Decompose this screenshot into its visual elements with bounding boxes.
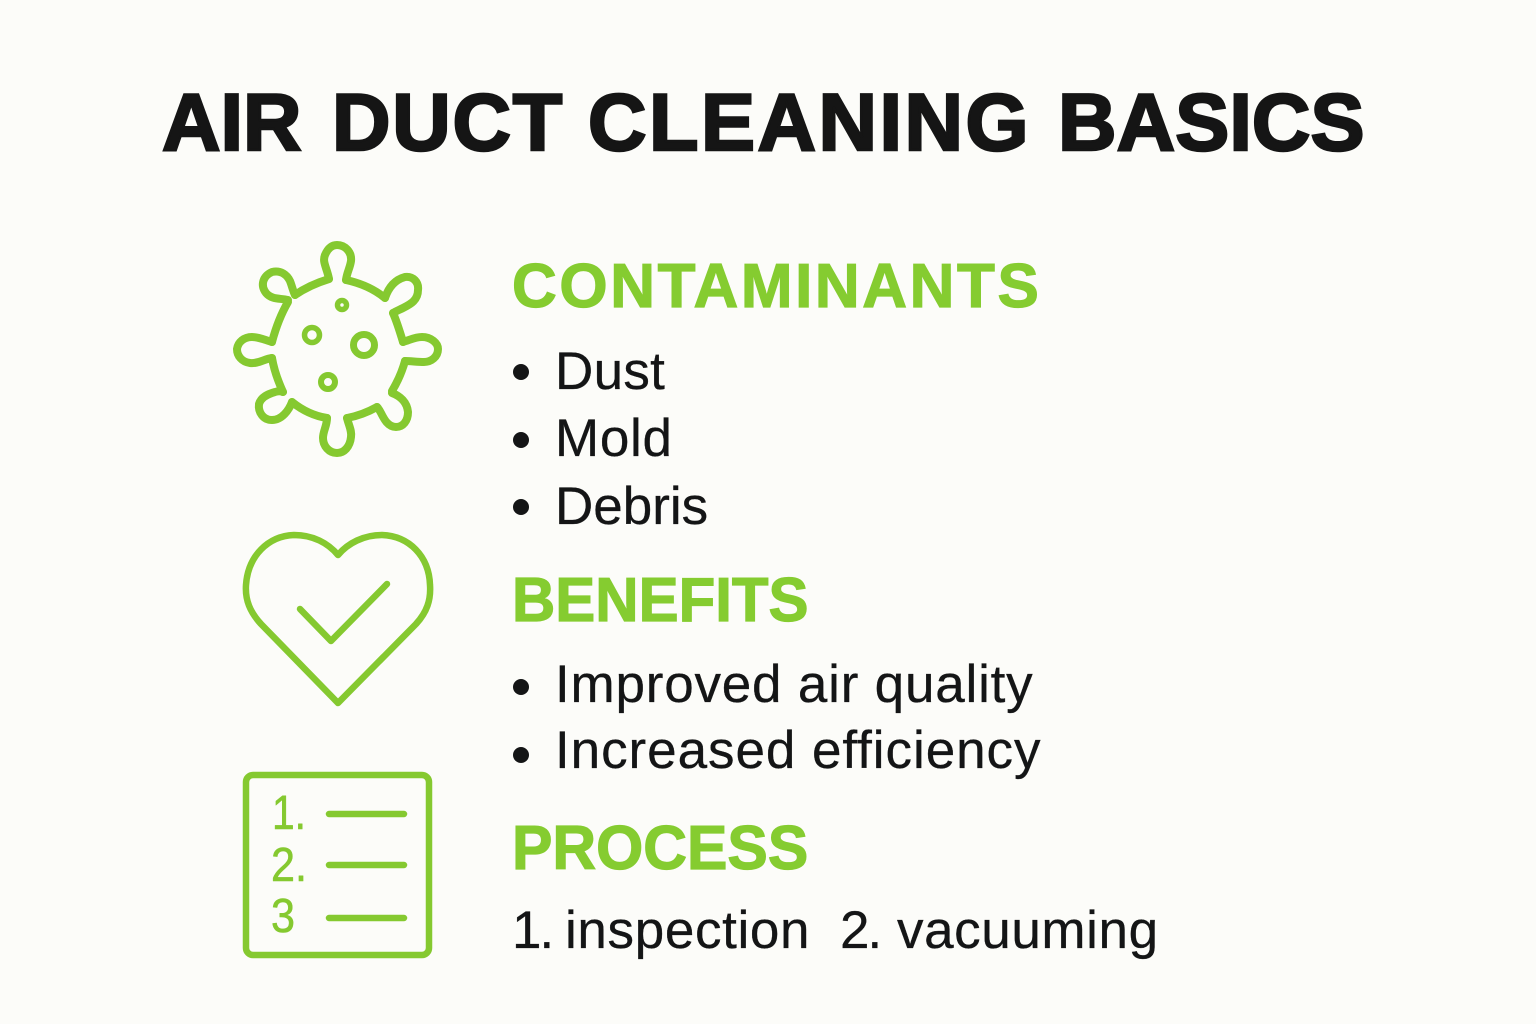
icon: numbered checklist: 3 (271, 890, 295, 943)
heading: process: PROCESS (512, 814, 808, 883)
title: BASICS (1058, 78, 1365, 168)
contaminants list: Dust (555, 342, 665, 401)
icon: heart with check (242, 532, 434, 706)
icon: numbered checklist: 1. (272, 787, 306, 840)
benefits list (513, 655, 1041, 780)
process steps: 1. (512, 901, 552, 960)
contaminants list (513, 342, 708, 536)
title (162, 78, 1365, 168)
heading: contaminants: CONTAMINANTS (512, 252, 1041, 321)
title: DUCT (332, 78, 564, 168)
contaminants list: Mold (555, 409, 673, 468)
heading: benefits: BENEFITS (512, 566, 808, 635)
title: CLEANING (588, 78, 1031, 168)
process steps: vacuuming (897, 901, 1159, 960)
process steps (512, 901, 1159, 960)
process steps: inspection (565, 901, 810, 960)
title: AIR (162, 78, 302, 168)
icon: numbered checklist (242, 772, 432, 958)
process steps: 2. (840, 901, 880, 960)
benefits list: Increased efficiency (555, 721, 1041, 780)
benefits list: Improved air quality (555, 655, 1033, 714)
icon: virus (233, 241, 442, 457)
contaminants list: Debris (555, 477, 708, 536)
icon: numbered checklist: 2. (271, 839, 307, 892)
